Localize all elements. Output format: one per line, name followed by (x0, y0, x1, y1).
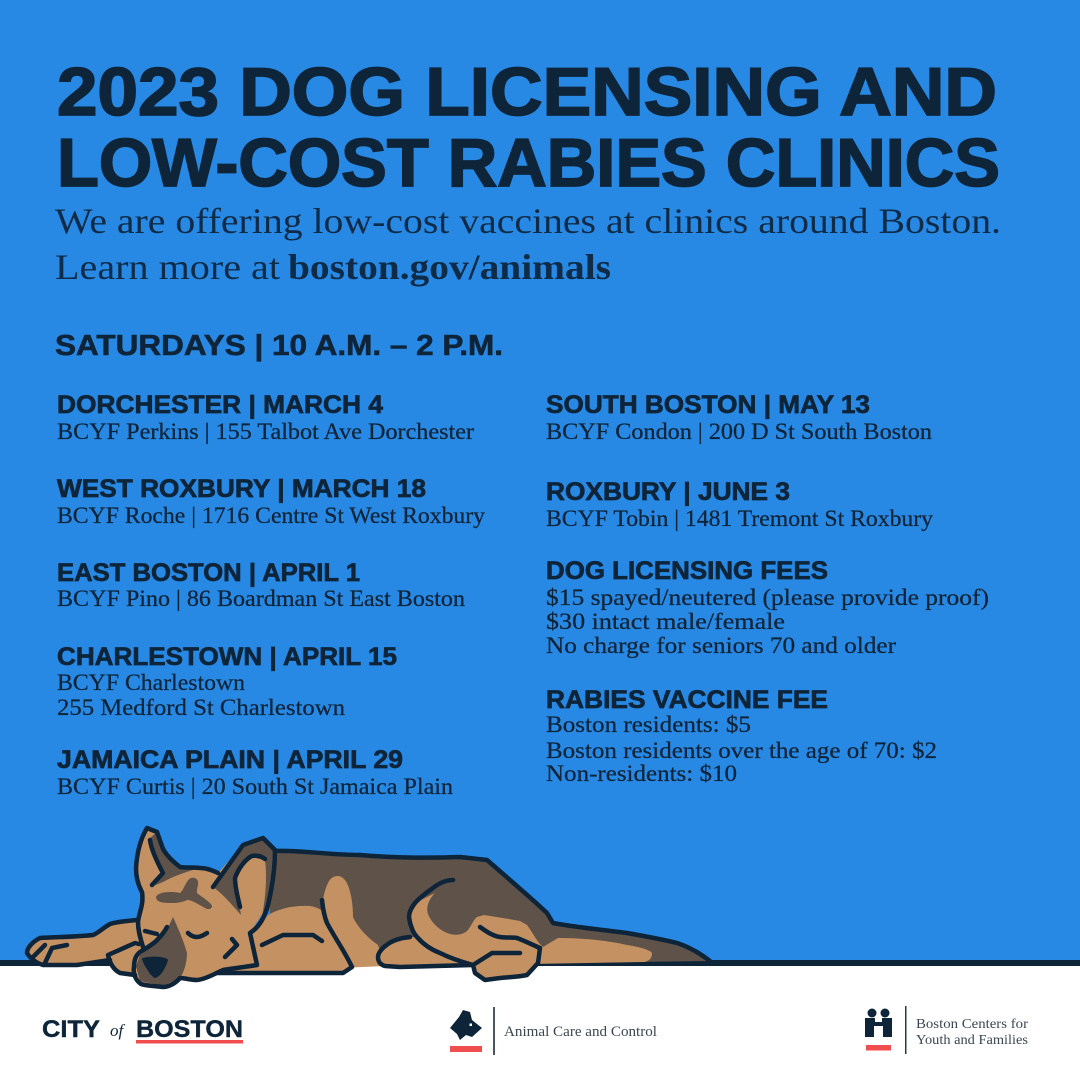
logo: City of Boston: of (110, 1021, 126, 1040)
clinic: West Roxbury: BCYF Roche | 1716 Centre St West Roxbury (57, 503, 486, 528)
title: 2023 DOG LICENSING AND (57, 55, 997, 130)
clinic: South Boston: SOUTH BOSTON | MAY 13 (546, 391, 870, 419)
rabies vaccine fee: Non-residents: $10 (546, 761, 737, 786)
dog body (270, 852, 710, 966)
clinic: East Boston: BCYF Pino | 86 Boardman St East Boston (57, 586, 466, 611)
dog muzzle (136, 917, 187, 986)
icon: two figures (865, 1008, 892, 1037)
dog nose (143, 958, 167, 977)
dog licensing fees: DOG LICENSING FEES (546, 557, 828, 585)
red underline (136, 1040, 243, 1044)
logo: City of Boston: BOSTON (136, 1016, 243, 1043)
logo: Boston Centers for Youth and Families (865, 1006, 1028, 1054)
clinic: Dorchester: BCYF Perkins | 155 Talbot Ave Dorchester (57, 419, 474, 444)
rabies vaccine fee: Boston residents over the age of 70: $2 (546, 738, 937, 763)
icon: dog head (450, 1010, 482, 1040)
intro text (55, 201, 1001, 287)
dog rear foot (440, 927, 540, 980)
logo: City of Boston: CITY (42, 1016, 100, 1043)
clinic: Charlestown (57, 643, 397, 720)
clinic: South Boston (546, 391, 933, 444)
clinic: Charlestown: CHARLESTOWN | APRIL 15 (57, 643, 397, 671)
dog leg under head (217, 933, 350, 973)
illustration: sleeping dog (27, 828, 710, 987)
clinic: West Roxbury: WEST ROXBURY | MARCH 18 (57, 475, 426, 503)
clinic: Dorchester: DORCHESTER | MARCH 4 (57, 391, 383, 419)
divider (493, 1007, 495, 1055)
clinic: Roxbury: ROXBURY | JUNE 3 (546, 478, 790, 506)
label (916, 1017, 1028, 1048)
ground line (0, 960, 1080, 966)
right column: clinics and fees (546, 391, 989, 786)
dog licensing fees: $15 spayed/neutered (please provide proof) (546, 585, 989, 610)
clinic: West Roxbury (57, 475, 486, 528)
clinic: Jamaica Plain: BCYF Curtis | 20 South St Jamaica Plain (57, 774, 454, 799)
dog licensing fees: $30 intact male/female (546, 609, 785, 634)
dog licensing fees: No charge for seniors 70 and older (546, 633, 896, 658)
label: Animal Care and Control (504, 1024, 657, 1040)
logo: Animal Care and Control (450, 1007, 657, 1055)
clinic: Charlestown: BCYF Charlestown (57, 670, 246, 695)
clinic: Roxbury (546, 478, 934, 531)
clinic: South Boston: BCYF Condon | 200 D St South Boston (546, 419, 933, 444)
dog front foot (378, 937, 473, 967)
intro text: Learn more at (55, 247, 280, 287)
left column: clinics (57, 391, 486, 799)
dog left ear shading (150, 832, 200, 886)
dog licensing fees (546, 557, 989, 658)
dog forehead marking (156, 878, 212, 909)
rabies vaccine fee (546, 686, 937, 786)
clinic: East Boston (57, 559, 466, 611)
red bar (866, 1045, 891, 1050)
divider (905, 1006, 906, 1054)
title (57, 55, 1000, 201)
rabies vaccine fee: Boston residents: $5 (546, 712, 751, 737)
dog outlines (27, 828, 710, 987)
intro text: We are offering low-cost vaccines at clinics around Boston. (55, 201, 1001, 241)
footer panel (0, 963, 1080, 1080)
schedule heading: SATURDAYS | 10 A.M. – 2 P.M. (55, 330, 503, 362)
dog right ear shading (213, 838, 275, 917)
intro text: boston.gov/animals (288, 247, 611, 287)
dog tan thigh (409, 893, 652, 965)
logo: City of Boston (42, 1016, 243, 1044)
dog head (135, 828, 275, 987)
title: LOW-COST RABIES CLINICS (57, 126, 1000, 201)
clinic: Dorchester (57, 391, 474, 444)
label: Boston Centers for (916, 1017, 1028, 1032)
clinic: Jamaica Plain: JAMAICA PLAIN | APRIL 29 (57, 746, 403, 774)
dog tan chest and shoulder (250, 876, 385, 972)
label: Youth and Families (916, 1033, 1028, 1048)
clinic: Charlestown: 255 Medford St Charlestown (57, 695, 346, 720)
dog left paw (27, 920, 145, 975)
red bar (450, 1046, 482, 1052)
clinic: Roxbury: BCYF Tobin | 1481 Tremont St Roxbury (546, 506, 934, 531)
rabies vaccine fee: RABIES VACCINE FEE (546, 686, 828, 714)
clinic: East Boston: EAST BOSTON | APRIL 1 (57, 559, 360, 587)
clinic: Jamaica Plain (57, 746, 454, 799)
